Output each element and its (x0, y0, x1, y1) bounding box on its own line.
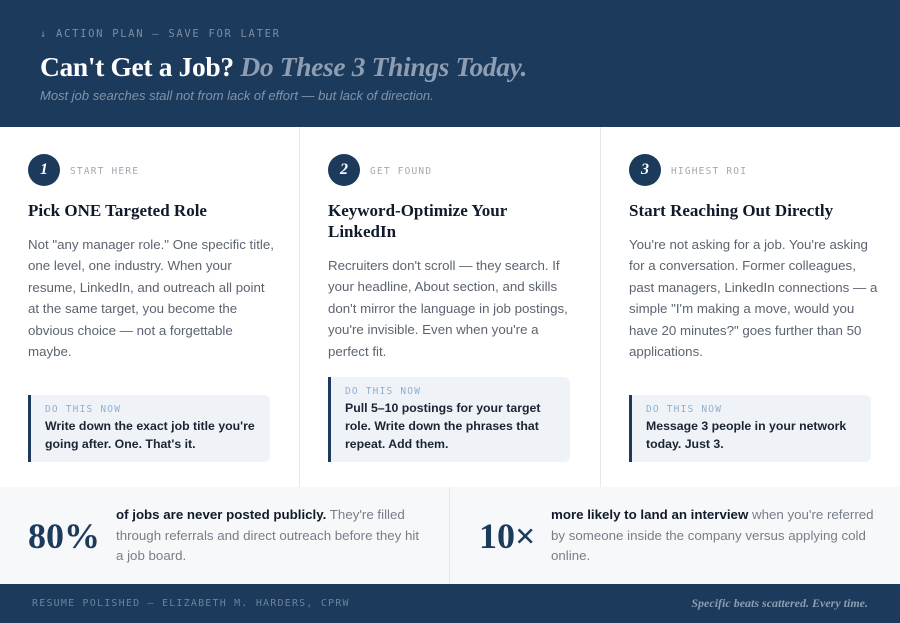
callout 3 (629, 395, 871, 462)
footer credit: RESUME POLISHED — ELIZABETH M. HARDERS, CPRW (32, 598, 350, 609)
icon: number 2 (328, 154, 360, 186)
stats band (0, 487, 900, 584)
callout 1: DO THIS NOW (45, 404, 121, 415)
title: Can't Get a Job? Do These 3 Things Today. (40, 51, 527, 82)
callout 2: DO THIS NOW (345, 386, 421, 397)
stat: 80%: of jobs are never posted publicly. They're filled through referrals and direct outreach before they hit a job board. (116, 507, 419, 563)
heading 1: Pick ONE Targeted Role (28, 201, 207, 220)
icon: number 1: 1 (40, 161, 48, 178)
kicker: ↓ ACTION PLAN — SAVE FOR LATER (40, 28, 281, 40)
stat: 80% (0, 487, 450, 584)
subtitle: Most job searches stall not from lack of effort — but lack of direction. (40, 88, 434, 103)
panel: step 1 (28, 154, 274, 462)
stat: 10x: more likely to land an interview when you're referred by someone inside the company versus applying cold online. (551, 507, 874, 563)
footer tagline: Specific beats scattered. Every time. (691, 596, 868, 610)
header (0, 0, 900, 127)
footer (0, 584, 900, 623)
callout 3: Message 3 people in your network today. Just 3. (646, 419, 846, 451)
body 1: Not "any manager role." One specific title, one level, one industry. When your resume, LinkedIn, and outreach all point at the same target, you become the obvious choice — not a forgettable maybe. (28, 237, 274, 359)
callout 2: Pull 5–10 postings for your target role. Write down the phrases that repeat. Add them. (345, 401, 540, 451)
icon: number 1 (28, 154, 60, 186)
heading 2: Keyword-Optimize Your LinkedIn (328, 201, 507, 241)
callout 1 (28, 395, 270, 462)
tag 3: HIGHEST ROI (671, 166, 747, 177)
tag 2: GET FOUND (370, 166, 432, 177)
callout 2 (328, 377, 570, 462)
icon: number 2: 2 (340, 161, 348, 178)
stat: 10x: 10× (479, 516, 536, 556)
tag 1: START HERE (70, 166, 139, 177)
icon: number 3 (629, 154, 661, 186)
panel: step 2 (299, 127, 600, 487)
panel: step 3 (600, 127, 900, 487)
body 2: Recruiters don't scroll — they search. If your headline, About section, and skills don't mirror the language in job postings, you're invisible. Even when you're a perfect fit. (328, 258, 568, 359)
callout 1: Write down the exact job title you're going after. One. That's it. (45, 419, 255, 451)
icon: number 3: 3 (641, 161, 649, 178)
callout 3: DO THIS NOW (646, 404, 722, 415)
body 3: You're not asking for a job. You're asking for a conversation. Former colleagues, past managers, LinkedIn connections — a simple "I'm making a move, would you have 20 minutes?" goes further than 50 applications. (629, 237, 877, 359)
heading 3: Start Reaching Out Directly (629, 201, 833, 220)
stat: 80%: 80% (28, 516, 100, 556)
